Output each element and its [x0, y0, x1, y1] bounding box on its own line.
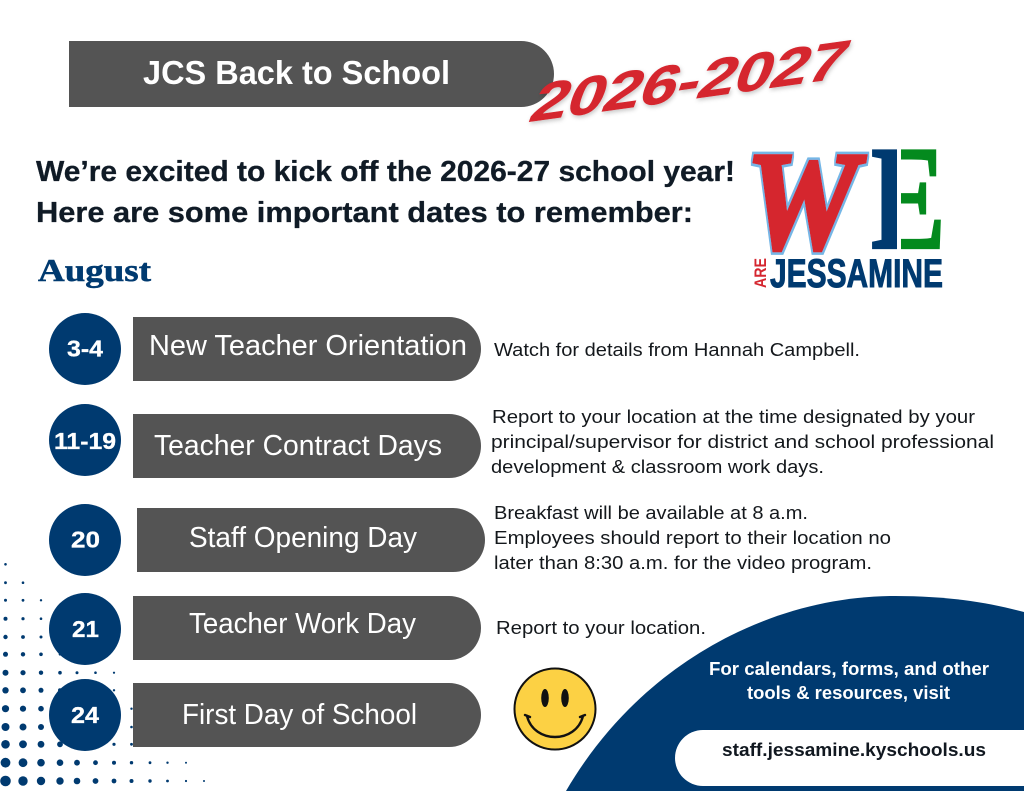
row: Staff Opening Day: later than 8:30 a.m. for the video program.: [494, 552, 872, 573]
row: Staff Opening Day: 20: [71, 526, 100, 552]
title banner: [69, 41, 554, 107]
logo: We Are Jessamine: JESSAMINE: [770, 252, 943, 296]
row: Teacher Contract Days: [49, 404, 994, 478]
logo: We Are Jessamine: W: [746, 124, 866, 279]
row: Teacher Contract Days: development & classroom work days.: [491, 456, 824, 477]
row: New Teacher Orientation: [49, 313, 860, 385]
row: Teacher Contract Days: principal/supervisor for district and school professional: [491, 431, 994, 452]
row: Teacher Work Day: Report to your location.: [496, 617, 706, 638]
halftone dot pattern: [0, 563, 205, 786]
logo: We Are Jessamine: [746, 116, 946, 296]
month heading: August: [38, 252, 151, 288]
intro text: [36, 156, 735, 229]
row: First Day of School: [49, 679, 481, 751]
row: First Day of School: 24: [71, 702, 99, 728]
intro text: We’re excited to kick off the 2026-27 school year!: [36, 156, 735, 188]
row: Staff Opening Day: Staff Opening Day: [189, 522, 418, 554]
row: Teacher Work Day: [49, 593, 706, 665]
row: Teacher Work Day: 21: [72, 616, 99, 642]
logo: We Are Jessamine: E: [871, 116, 946, 281]
row: Teacher Work Day: Teacher Work Day: [189, 608, 417, 640]
logo: We Are Jessamine: ARE: [751, 258, 770, 288]
title banner: JCS Back to School: [143, 54, 450, 91]
row: First Day of School: First Day of School: [182, 699, 417, 731]
row: Staff Opening Day: Breakfast will be available at 8 a.m.: [494, 502, 808, 523]
panel: resources callout: [566, 596, 1024, 791]
row: Teacher Contract Days: 11-19: [54, 428, 116, 454]
panel: resources callout: For calendars, forms, and other: [709, 659, 989, 679]
row: Staff Opening Day: [49, 502, 891, 576]
year script heading: 2026-2027: [523, 28, 858, 134]
panel: resources callout: tools & resources, visit: [747, 683, 950, 703]
row: Staff Opening Day: Employees should report to their location no: [494, 527, 891, 548]
icon: smiley face: [514, 668, 596, 750]
row: New Teacher Orientation: 3-4: [67, 336, 103, 362]
row: New Teacher Orientation: New Teacher Orientation: [149, 330, 467, 362]
panel: resources callout: staff.jessamine.kyschools.us: [722, 739, 986, 760]
row: Teacher Contract Days: Report to your location at the time designated by your: [492, 406, 975, 427]
row: New Teacher Orientation: Watch for details from Hannah Campbell.: [494, 339, 860, 360]
intro text: Here are some important dates to remember:: [36, 197, 693, 229]
row: Teacher Contract Days: Teacher Contract Days: [154, 430, 442, 462]
